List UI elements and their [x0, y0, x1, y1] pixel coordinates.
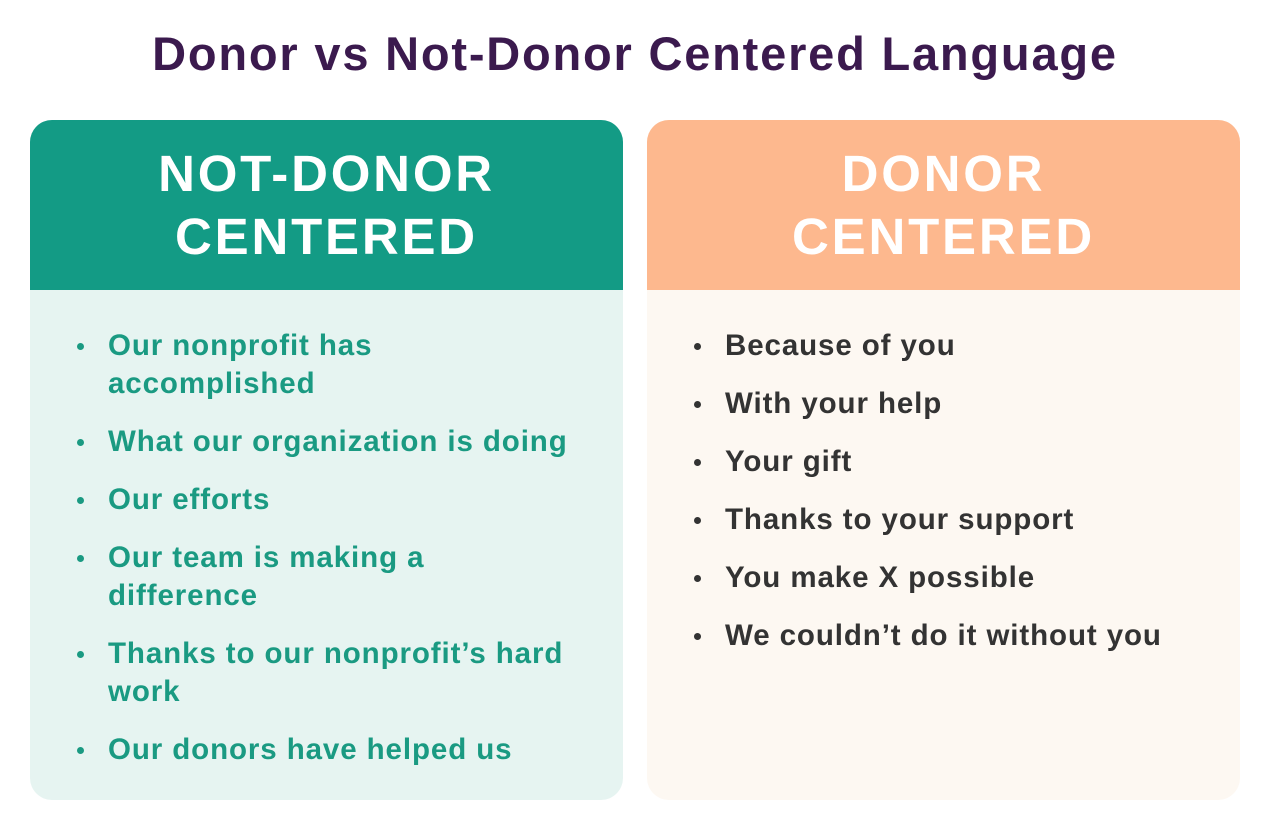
list: not-donor phrases: accomplished	[108, 367, 316, 400]
list: donor phrases	[694, 329, 1162, 652]
list: not-donor phrases: difference	[108, 579, 258, 612]
list: donor phrases: Your gift	[725, 445, 852, 478]
list: not-donor phrases: work	[108, 675, 180, 708]
panel: not-donor centered	[30, 120, 623, 800]
list: donor phrases: You make X possible	[725, 561, 1035, 594]
list: not-donor phrases	[77, 329, 568, 766]
title: Donor vs Not-Donor Centered Language	[152, 27, 1118, 80]
heading: donor centered: DONOR	[842, 145, 1045, 202]
list: not-donor phrases: Our donors have helped us	[108, 733, 512, 766]
list: donor phrases: With your help	[725, 387, 942, 420]
list: not-donor phrases: Thanks to our nonprofit’s hard	[108, 637, 563, 670]
list: donor phrases: We couldn’t do it without you	[725, 619, 1162, 652]
list: not-donor phrases: Our efforts	[108, 483, 270, 516]
heading: not-donor centered	[30, 120, 623, 290]
heading: donor centered: CENTERED	[792, 208, 1095, 265]
heading: not-donor centered: CENTERED	[175, 208, 478, 265]
list: not-donor phrases: What our organization is doing	[108, 425, 568, 458]
heading: donor centered	[647, 120, 1240, 290]
list: donor phrases: Thanks to your support	[725, 503, 1074, 536]
list: not-donor phrases: Our team is making a	[108, 541, 424, 574]
list: not-donor phrases: Our nonprofit has	[108, 329, 372, 362]
list: donor phrases: Because of you	[725, 329, 956, 362]
panel: donor centered	[647, 120, 1240, 800]
heading: not-donor centered: NOT-DONOR	[158, 145, 495, 202]
